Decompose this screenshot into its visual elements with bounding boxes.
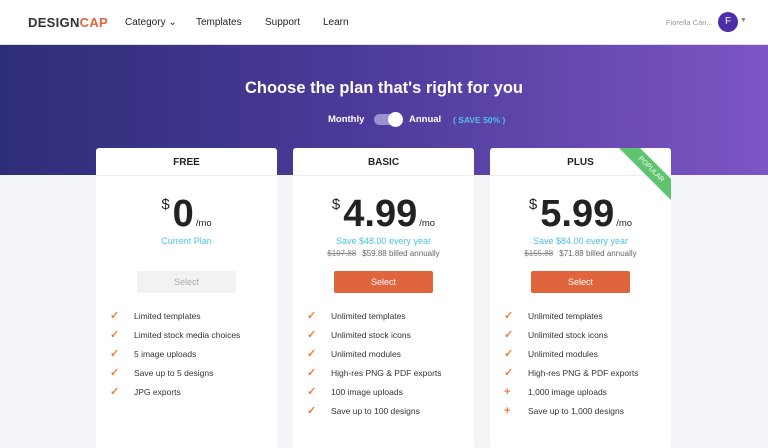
card: basic: ✓ [307, 329, 316, 341]
title: Choose the plan that's right for you [245, 79, 523, 97]
card: basic: Save up to 100 designs [331, 406, 420, 416]
card: plus: Unlimited stock icons [528, 330, 608, 340]
toggle: Monthly [328, 114, 364, 125]
hero banner [0, 45, 768, 175]
card: plus: + [504, 405, 510, 417]
toggle: Annual [409, 114, 441, 125]
nav links: Support [265, 17, 300, 28]
card: free: Limited templates [134, 311, 201, 321]
card: free: Limited stock media choices [134, 330, 240, 340]
card: basic: ✓ [307, 386, 316, 398]
card: plus: PLUS [567, 157, 594, 168]
card: free: ✓ [110, 329, 119, 341]
card: basic: $4.99/mo [332, 193, 435, 235]
nav links: Learn [323, 17, 349, 28]
toggle [328, 112, 505, 127]
card: plus: ✓ [504, 329, 513, 341]
card: plus: ✓ [504, 348, 513, 360]
card: plus: Unlimited templates [528, 311, 603, 321]
card: plus: $5.99/mo [529, 193, 632, 235]
card: plus: ✓ [504, 367, 513, 379]
card: free: 5 image uploads [134, 349, 196, 359]
card: free: $0/mo [161, 193, 212, 235]
card: basic: 100 image uploads [331, 387, 403, 397]
card: free: Save up to 5 designs [134, 368, 213, 378]
card: basic: Unlimited templates [331, 311, 406, 321]
card: basic: Select [371, 277, 396, 287]
card: free: Current Plan [161, 236, 212, 246]
card: free: Select [174, 277, 199, 287]
card: free: ✓ [110, 367, 119, 379]
card: plus: High-res PNG & PDF exports [528, 368, 639, 378]
card: basic: ✓ [307, 367, 316, 379]
user: Fiorella Cán... [666, 18, 713, 27]
card: plus: Select [568, 277, 593, 287]
logo: DESIGNCAP [28, 15, 108, 30]
card: plus: $155.88 $71.88 billed annually [524, 249, 637, 258]
card: plus: + [504, 386, 510, 398]
user [666, 12, 747, 32]
nav links [125, 17, 349, 28]
card: free: ✓ [110, 386, 119, 398]
card: plus: Unlimited modules [528, 349, 598, 359]
user: ▼ [740, 17, 747, 24]
card: basic: BASIC [368, 157, 399, 168]
card: plus [490, 148, 671, 448]
navbar [0, 0, 768, 45]
card: basic: High-res PNG & PDF exports [331, 368, 442, 378]
card: plus: 1,000 image uploads [528, 387, 607, 397]
popular ribbon [614, 132, 688, 207]
card: plus: Save $84.00 every year [533, 236, 628, 246]
card: plus: Save up to 1,000 designs [528, 406, 624, 416]
card: basic: Save $48.00 every year [336, 236, 431, 246]
card: basic [293, 148, 474, 448]
user: F [725, 16, 731, 27]
card: free: ✓ [110, 348, 119, 360]
card: basic: $107.88 $59.88 billed annually [327, 249, 440, 258]
card: basic: Unlimited stock icons [331, 330, 411, 340]
nav links: Category ⌄ [125, 17, 177, 28]
card: basic: ✓ [307, 310, 316, 322]
nav links: Templates [196, 17, 242, 28]
card: basic: ✓ [307, 348, 316, 360]
card: basic: Unlimited modules [331, 349, 401, 359]
toggle: ( SAVE 50% ) [453, 115, 505, 125]
card: free: FREE [173, 157, 200, 168]
card: free [96, 148, 277, 448]
popular ribbon: POPULAR [637, 155, 665, 184]
card: free: ✓ [110, 310, 119, 322]
card: basic: ✓ [307, 405, 316, 417]
card: plus: ✓ [504, 310, 513, 322]
card: free: JPG exports [134, 387, 181, 397]
